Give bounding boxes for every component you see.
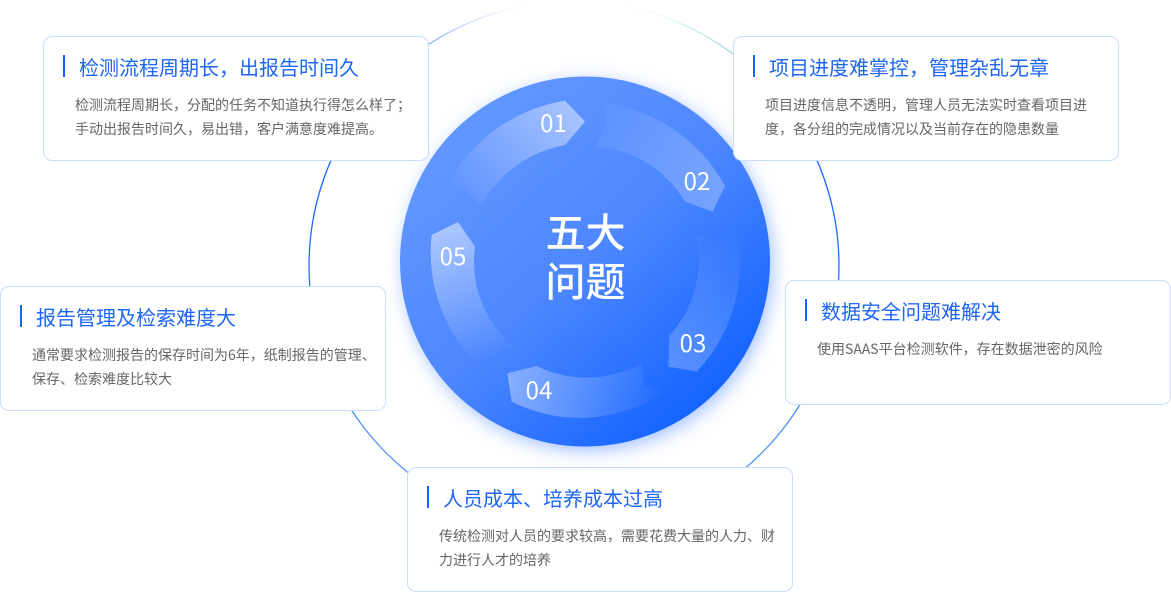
number 03: 03 xyxy=(680,324,706,359)
card text: 检测流程周期长，分配的任务不知道执行得怎么样了； xyxy=(75,95,411,115)
arrow segment 05 xyxy=(431,222,512,377)
number 02: 02 xyxy=(684,162,710,197)
card heading: 报告管理及检索难度大 xyxy=(36,302,236,331)
disc glow xyxy=(404,82,772,450)
arrow segment 02 xyxy=(596,103,725,212)
card text: 手动出报告时间久，易出错，客户满意度难提高。 xyxy=(75,119,383,139)
card heading: 人员成本、培养成本过高 xyxy=(443,483,663,512)
card heading: 检测流程周期长，出报告时间久 xyxy=(79,52,359,81)
center title: 五大 xyxy=(546,201,626,259)
card text xyxy=(32,345,376,389)
center title xyxy=(546,201,626,308)
card text: 项目进度信息不透明，管理人员无法实时查看项目进 xyxy=(765,95,1087,115)
cycle arrows xyxy=(431,101,740,418)
card: project progress xyxy=(733,36,1119,161)
card text: 传统检测对人员的要求较高，需要花费大量的人力、财 xyxy=(439,526,775,546)
card heading: 项目进度难掌控，管理杂乱无章 xyxy=(769,52,1049,81)
card: data security xyxy=(785,280,1171,405)
card text xyxy=(439,526,775,570)
outer ring xyxy=(309,1,839,531)
center title: 问题 xyxy=(546,250,626,308)
arrow segment 03 xyxy=(668,220,740,372)
card text xyxy=(765,95,1087,139)
card text: 使用SAAS平台检测软件，存在数据泄密的风险 xyxy=(817,339,1103,359)
arrow segment 04 xyxy=(507,363,667,418)
blue disc xyxy=(400,76,770,446)
number 01: 01 xyxy=(540,104,567,139)
heading accent bar xyxy=(427,486,429,508)
number 05: 05 xyxy=(440,237,466,272)
card: staff cost xyxy=(407,467,793,592)
heading accent bar xyxy=(63,55,65,77)
card heading: 数据安全问题难解决 xyxy=(821,296,1001,325)
card text xyxy=(75,95,411,139)
card text: 力进行人才的培养 xyxy=(439,550,551,570)
number 04: 04 xyxy=(526,371,552,406)
card text: 保存、检索难度比较大 xyxy=(32,369,172,389)
card: long inspection cycle xyxy=(43,36,429,161)
heading accent bar xyxy=(753,55,755,77)
card text: 度，各分组的完成情况以及当前存在的隐患数量 xyxy=(765,119,1059,139)
card text: 通常要求检测报告的保存时间为6年，纸制报告的管理、 xyxy=(32,345,376,365)
heading accent bar xyxy=(20,305,22,327)
number labels xyxy=(440,104,710,406)
heading accent bar xyxy=(805,299,807,321)
arrow segment 01 xyxy=(443,101,585,207)
card: report management xyxy=(0,286,386,411)
